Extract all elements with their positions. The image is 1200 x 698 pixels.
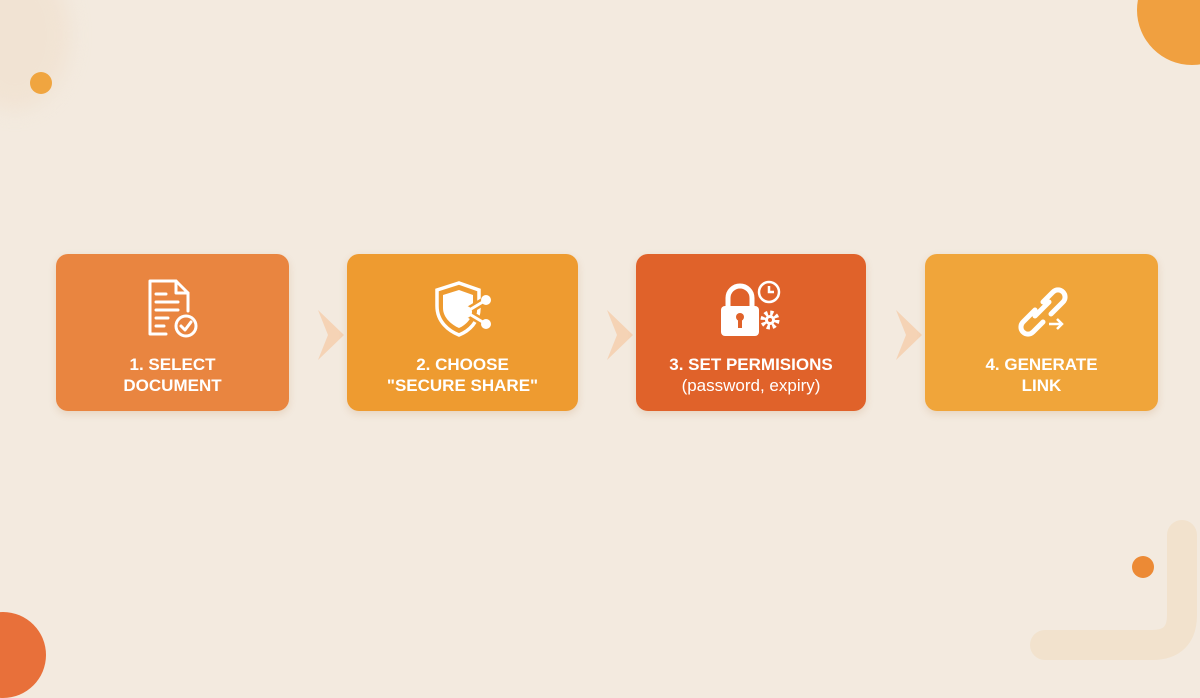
icon: link arrow: [1018, 287, 1068, 337]
decoration: bottom-left circle: [0, 612, 46, 698]
panel: step 1: [56, 254, 289, 411]
text: step 4 label: [985, 355, 1098, 395]
icon: document check: [148, 280, 198, 338]
decoration: top-left dot: [30, 72, 52, 94]
text: step 3 label: [669, 355, 833, 395]
panel: step 4: [925, 254, 1158, 411]
text: step 2 label: 2. CHOOSE: [416, 355, 509, 374]
decoration: top-right circle: [1137, 0, 1200, 65]
text: step 2 label: [387, 355, 538, 395]
arrow 1: [318, 310, 344, 360]
text: step 4 label: 4. GENERATE: [985, 355, 1098, 374]
text: step 3 label: 3. SET PERMISIONS: [669, 355, 833, 374]
text: step 2 label: "SECURE SHARE": [387, 376, 538, 395]
panel: step 2: [347, 254, 578, 411]
icon: lock clock gear: [721, 280, 780, 336]
arrow 3: [896, 310, 922, 360]
text: step 1 label: [123, 355, 222, 395]
panel: step 3: [636, 254, 866, 411]
arrow 2: [607, 310, 633, 360]
text: step 4 label: LINK: [1022, 376, 1061, 395]
decoration: bottom-right dot: [1132, 556, 1154, 578]
decoration: top-left blob: [0, 0, 70, 110]
text: step 1 label: 1. SELECT: [130, 355, 215, 374]
text: step 3 label: (password, expiry): [682, 376, 820, 395]
text: step 1 label: DOCUMENT: [123, 376, 222, 395]
icon: shield share: [435, 281, 491, 337]
